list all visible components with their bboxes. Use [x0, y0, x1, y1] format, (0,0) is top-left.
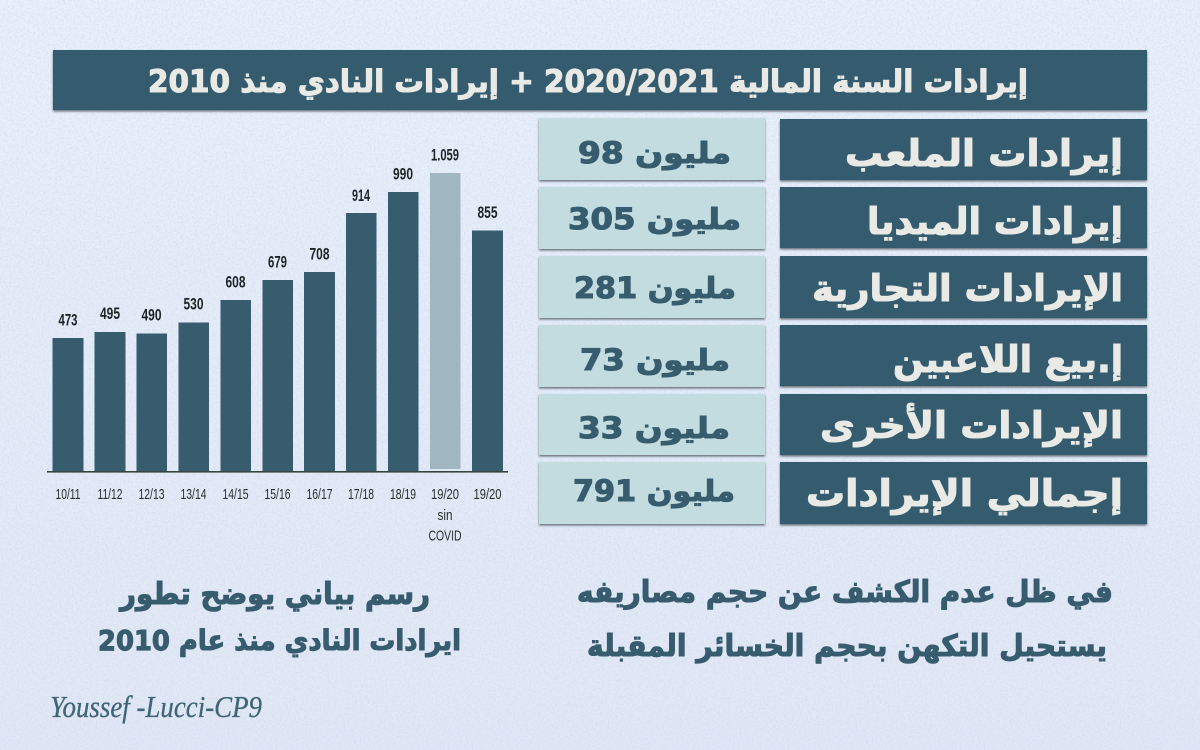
row: player sales: إ.بيع اللاعبين — [893, 338, 1123, 381]
season labels: 15/16 — [264, 486, 290, 503]
row: player sales — [539, 325, 1147, 387]
value labels: 708 — [310, 244, 330, 264]
season labels: 13/14 — [180, 486, 206, 503]
value labels: 530 — [184, 294, 204, 314]
row: other revenue: مليون 33 — [578, 411, 730, 445]
row: commercial revenue: مليون 281 — [574, 271, 736, 305]
row: stadium revenue: مليون 98 — [578, 136, 731, 170]
season labels: 18/19 — [390, 486, 416, 503]
value labels: 490 — [142, 306, 162, 324]
bars — [52, 173, 503, 471]
season labels: 11/12 — [98, 486, 122, 503]
season labels — [56, 486, 502, 544]
row: stadium revenue: إيرادات الملعب — [845, 132, 1123, 175]
season labels: 16/17 — [306, 486, 332, 503]
title banner — [53, 50, 1147, 110]
value labels: 608 — [226, 272, 246, 292]
title banner: إيرادات السنة المالية 2020/2021 + إيرادات النادي منذ 2010 — [148, 64, 1028, 100]
row: commercial revenue: الإيرادات التجارية — [812, 267, 1123, 310]
season labels: 17/18 — [348, 486, 374, 503]
row: total revenue: إجمالي الإيرادات — [806, 472, 1123, 515]
value labels: 855 — [478, 203, 498, 222]
bar chart: revenue since 2010 — [47, 146, 508, 544]
season labels: COVID — [428, 528, 462, 544]
season labels: sin — [438, 507, 452, 524]
caption: chart description — [98, 577, 461, 657]
row: total revenue: مليون 791 — [573, 474, 735, 508]
row: player sales: مليون 73 — [580, 343, 730, 377]
value labels: 473 — [58, 310, 78, 330]
caption: chart description: رسم بياني يوضح تطور — [118, 577, 430, 612]
row: media revenue — [539, 187, 1147, 249]
season labels: 12/13 — [138, 486, 164, 503]
caption: chart description: ايرادات النادي منذ عام 2010 — [98, 624, 461, 657]
row: total revenue — [539, 462, 1147, 524]
value labels — [58, 146, 498, 330]
season labels: 19/20 — [474, 486, 502, 503]
axis line — [47, 471, 508, 473]
caption: expenses note: يستحيل التكهن بحجم الخسائر المقبلة — [587, 629, 1107, 664]
season labels: 19/20 — [431, 486, 459, 503]
row: stadium revenue — [539, 118, 1147, 180]
row: media revenue: إيرادات الميديا — [867, 200, 1123, 243]
caption: expenses note: في ظل عدم الكشف عن حجم مصاريفه — [577, 575, 1113, 610]
value labels: 1.059 — [431, 146, 459, 164]
value labels: 914 — [352, 186, 370, 205]
caption: expenses note — [577, 575, 1113, 664]
value labels: 990 — [393, 164, 413, 184]
row: other revenue: الإيرادات الأخرى — [820, 402, 1123, 447]
season labels: 14/15 — [222, 486, 248, 503]
row: media revenue: مليون 305 — [568, 202, 741, 236]
value labels: 495 — [100, 304, 120, 323]
row: commercial revenue — [539, 256, 1147, 318]
signature: Youssef -Lucci-CP9 — [50, 689, 262, 724]
season labels: 10/11 — [56, 486, 80, 503]
row: other revenue — [539, 394, 1147, 455]
value labels: 679 — [268, 252, 287, 272]
panel: revenue table — [539, 118, 1147, 524]
